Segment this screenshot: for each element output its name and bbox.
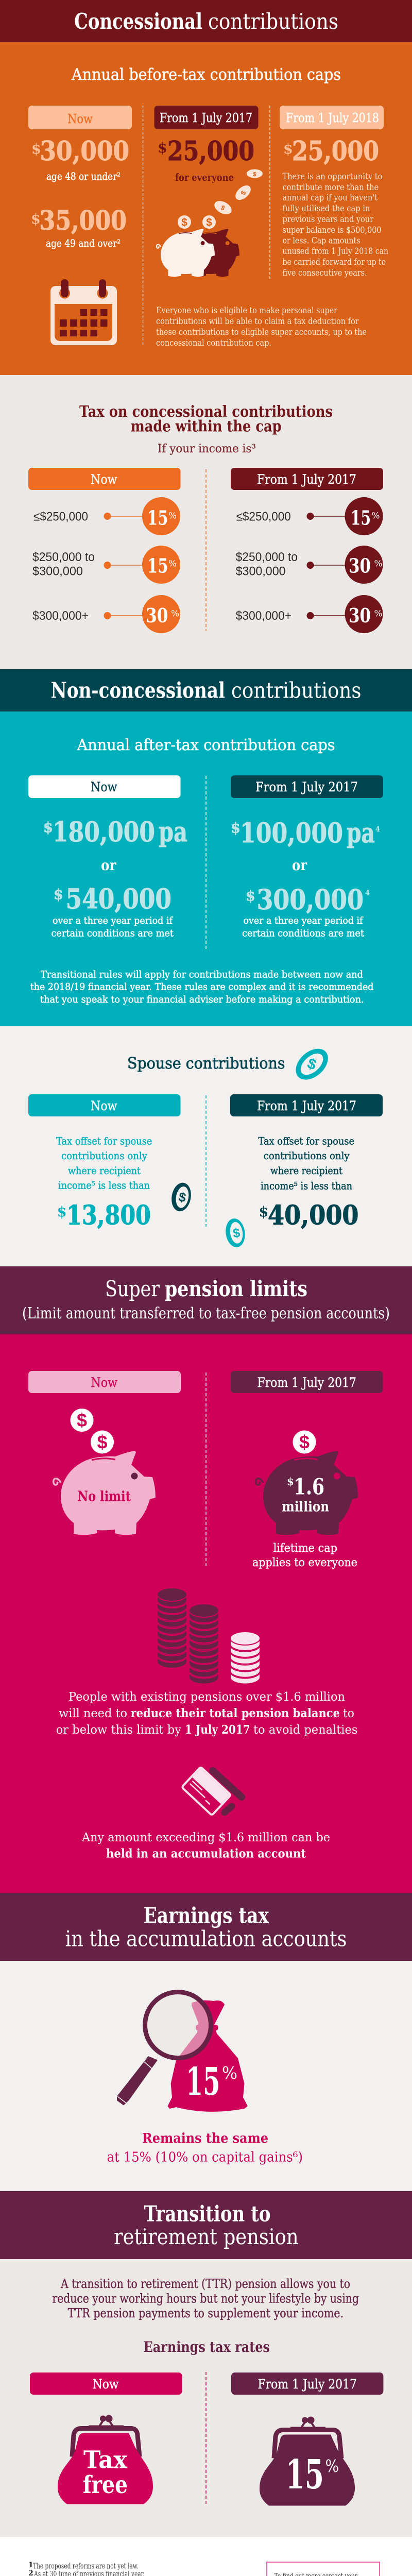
header band: earnings tax xyxy=(0,1893,412,1961)
column: from 1 July 2017: $300,000+ xyxy=(236,609,291,623)
icon: falling coins: $ xyxy=(252,171,257,178)
header band: transition to retirement: retirement pension xyxy=(114,2224,299,2249)
panel: spouse contributions xyxy=(0,1026,412,1266)
column: now xyxy=(28,775,187,939)
column: from 1 July 2017: From 1 July 2017 xyxy=(160,111,252,125)
column: now: 15 xyxy=(147,554,168,577)
text: tax deduction note: Everyone who is eligible to make personal super xyxy=(156,306,338,316)
text: TTR explanation: A transition to retirement (TTR) pension allows you to xyxy=(60,2277,350,2291)
icon: credit card xyxy=(182,1767,242,1816)
column: now: where recipient xyxy=(68,1164,141,1177)
column: now: income⁵ is less than xyxy=(58,1179,150,1192)
text: remains the same xyxy=(107,2131,303,2165)
panel: non-concessional contributions xyxy=(0,669,412,1026)
icon: falling coins: $ xyxy=(181,216,187,229)
column: from 1 July 2017: contributions only xyxy=(264,1149,350,1162)
text: carry forward explanation: contribute more than the xyxy=(282,182,379,193)
heading: tax within the cap: made within the cap xyxy=(131,417,282,435)
text: remains the same: Remains the same xyxy=(142,2131,268,2146)
icon: magnifier over money bag: 15 xyxy=(186,2060,220,2104)
column: from 1 July 2017: pa xyxy=(347,817,375,849)
column: from 1 July 2017: $300,000 xyxy=(236,565,286,579)
text: reduce pension balance: 1 July 2017 xyxy=(185,1723,250,1737)
icon: falling coins: $ xyxy=(206,216,212,229)
column: from 1 July 2017: $ xyxy=(246,888,255,904)
column: now: over a three year period if xyxy=(53,915,174,926)
column: from 1 July 2017 xyxy=(231,468,383,633)
header band: concessional contributions xyxy=(0,0,412,42)
column: from 1 July 2017: over a three year period if xyxy=(243,915,364,926)
text: reduce pension balance xyxy=(56,1690,357,1737)
text: tax deduction note: contributions will be able to claim a tax deduction for xyxy=(156,316,359,327)
column: now xyxy=(28,1371,181,1535)
column: now: No limit xyxy=(77,1488,131,1504)
icon: dark purse xyxy=(260,2416,355,2506)
column: now: age 49 and over² xyxy=(46,237,121,249)
column: from 1 July 2017: 1.6 xyxy=(294,1474,324,1500)
column: from 1 July 2017: 25,000 xyxy=(167,136,254,167)
column: from 1 July 2018: 25,000 xyxy=(292,136,379,167)
column: now: free xyxy=(83,2471,128,2499)
column: now: % xyxy=(168,511,177,521)
text: remains the same: at 15% (10% on capital gains⁶) xyxy=(107,2150,303,2165)
column: from 1 July 2017: From 1 July 2017 xyxy=(257,472,356,487)
column: from 1 July 2017: where recipient xyxy=(270,1164,342,1177)
text: reduce pension balance: will need to xyxy=(59,1707,127,1720)
text: TTR explanation xyxy=(53,2277,359,2320)
text: accumulation account: Any amount exceeding $1.6 million can be xyxy=(81,1831,330,1844)
text: transitional rules note: the 2018/19 financial year. These rules are complex and it is recommended xyxy=(30,981,373,993)
footnotes: The proposed reforms are not yet law. xyxy=(33,2562,139,2571)
header band: super pension limits: pension limits xyxy=(165,1276,307,1301)
column: now: 15 xyxy=(147,506,168,530)
column: from 1 July 2017 xyxy=(224,1094,383,1248)
column: now: % xyxy=(168,559,177,569)
header band: concessional contributions: Concessional xyxy=(74,9,202,34)
column: now: % xyxy=(171,609,179,619)
column: from 1 July 2017: 30 xyxy=(349,604,371,627)
subheading: income: If your income is³ xyxy=(158,443,256,455)
text: reduce pension balance: or below this limit by xyxy=(56,1723,181,1737)
icon: falling coins: $ xyxy=(239,189,248,196)
column: now: contributions only xyxy=(61,1149,148,1162)
column: from 1 July 2017: 4 xyxy=(375,825,380,834)
text: transitional rules note xyxy=(30,969,373,1005)
heading: tax within the cap: Tax on concessional contributions xyxy=(79,403,333,421)
heading: spouse contributions: Spouse contributions xyxy=(127,1055,285,1073)
column: from 1 July 2017: income⁵ is less than xyxy=(261,1180,352,1192)
column: from 1 July 2017: $ xyxy=(299,1431,310,1453)
icon: teal coin xyxy=(224,1217,247,1248)
column: from 1 July 2017 xyxy=(231,2372,383,2506)
column: now: $ xyxy=(57,1204,66,1220)
column: from 1 July 2017: certain conditions are met xyxy=(242,927,364,939)
column: from 1 July 2017: $250,000 to xyxy=(236,550,298,564)
callout: contact box xyxy=(267,2562,380,2576)
heading: tax within the cap xyxy=(79,403,333,435)
column: from 1 July 2017: From 1 July 2017 xyxy=(258,2377,357,2392)
panel: concessional contributions xyxy=(0,0,412,375)
column: now: 13,800 xyxy=(66,1200,151,1231)
text: carry forward explanation: unused from 1 July 2018 can xyxy=(282,246,388,257)
column: now: 30 xyxy=(146,604,168,627)
column: now: $300,000 xyxy=(32,565,83,579)
column: from 1 July 2017: 15 xyxy=(351,506,371,530)
column: now: $250,000 to xyxy=(32,550,95,564)
column: now: ≤$250,000 xyxy=(33,510,88,524)
text: accumulation account: held in an accumulation account xyxy=(106,1847,306,1861)
header band: super pension limits: Super xyxy=(105,1276,160,1301)
column: now: $ xyxy=(54,887,63,903)
text: carry forward explanation: fully utilised the cap in xyxy=(282,204,370,214)
divider xyxy=(205,1095,207,1227)
column: from 1 July 2018 xyxy=(280,106,388,278)
text: carry forward explanation: five consecutive years. xyxy=(282,268,367,278)
column: from 1 July 2017: 100,000 xyxy=(240,817,343,849)
header band: earnings tax: in the accumulation accounts xyxy=(65,1926,347,1952)
column: from 1 July 2017: From 1 July 2017 xyxy=(255,779,358,794)
column: now xyxy=(28,468,180,633)
column: from 1 July 2017: ≤$250,000 xyxy=(236,510,291,524)
column: from 1 July 2017: % xyxy=(374,559,382,569)
column: from 1 July 2017: applies to everyone xyxy=(252,1556,357,1569)
header band: super pension limits xyxy=(0,1266,412,1334)
column: now: $300,000+ xyxy=(32,609,89,623)
icon: magnifier over money bag xyxy=(117,1992,248,2112)
icon: pink piggy bank xyxy=(54,1451,156,1535)
column: from 1 July 2017: 30 xyxy=(349,554,371,577)
text: carry forward explanation: be carried forward for up to xyxy=(282,257,386,267)
column: from 1 July 2017: $ xyxy=(158,140,167,156)
divider xyxy=(205,469,207,631)
column: now: 540,000 xyxy=(66,883,171,915)
column: from 1 July 2017 xyxy=(231,775,383,939)
header band: non-concessional contributions: contributions xyxy=(231,678,362,703)
heading: annual after-tax caps: Annual after-tax contribution caps xyxy=(77,736,335,754)
column: from 1 July 2018: From 1 July 2018 xyxy=(286,111,379,125)
column: from 1 July 2017: 15 xyxy=(286,2451,324,2498)
text: accumulation account xyxy=(81,1831,330,1861)
icon: dark coin xyxy=(169,1181,193,1213)
divider xyxy=(205,776,207,950)
column: now: 30,000 xyxy=(40,136,129,167)
header band: transition to retirement xyxy=(0,2191,412,2259)
text: carry forward explanation xyxy=(282,172,388,278)
column: now: $ xyxy=(31,141,41,157)
column: from 1 July 2017: From 1 July 2017 xyxy=(257,1098,356,1113)
text: TTR explanation: TTR pension payments to supplement your income. xyxy=(68,2306,344,2320)
icon: falling coins: $ xyxy=(219,204,227,212)
column: now xyxy=(28,106,132,345)
column: now: Now xyxy=(67,112,93,126)
column: now: Tax xyxy=(83,2446,128,2475)
column: now: $ xyxy=(77,1410,87,1431)
text: carry forward explanation: annual cap if you haven't xyxy=(282,193,377,203)
column: now: Tax offset for spouse xyxy=(56,1134,152,1147)
text: transitional rules note: Transitional rules will apply for contributions made between now and xyxy=(41,969,363,980)
text: reduce pension balance: to xyxy=(343,1707,354,1720)
column: from 1 July 2018: $ xyxy=(283,141,293,157)
column: now: certain conditions are met xyxy=(52,927,174,939)
icon: spouse coin xyxy=(290,1043,334,1086)
header band: non-concessional contributions: Non-concessional xyxy=(50,678,225,703)
column: from 1 July 2017: 40,000 xyxy=(268,1200,358,1231)
text: reduce pension balance: People with existing pensions over $1.6 million xyxy=(68,1690,345,1704)
heading: annual before-tax caps: Annual before-tax contribution caps xyxy=(71,65,341,84)
text: carry forward explanation: previous years and your xyxy=(282,214,374,225)
column: from 1 July 2017: $ xyxy=(287,1476,294,1488)
column: from 1 July 2017: $ xyxy=(259,1204,268,1220)
text: reduce pension balance: reduce their total pension balance xyxy=(131,1706,340,1720)
header band: concessional contributions: contributions xyxy=(208,9,338,34)
icon: spouse coin: $ xyxy=(305,1055,319,1074)
icon: falling coins xyxy=(178,169,263,229)
panel: footer xyxy=(0,2537,412,2576)
column: now: age 48 or under² xyxy=(46,170,121,182)
panel: super pension limits xyxy=(0,1266,412,1893)
column: from 1 July 2017: 300,000 xyxy=(256,884,364,916)
column: from 1 July 2017: % xyxy=(325,2456,339,2476)
icon: piggy banks xyxy=(157,229,239,277)
text: reduce pension balance: to avoid penalties xyxy=(253,1723,357,1737)
column: from 1 July 2017: From 1 July 2017 xyxy=(258,1375,356,1390)
column: from 1 July 2017: for everyone xyxy=(175,171,234,183)
text: carry forward explanation: or less. Cap amounts xyxy=(282,236,360,246)
column: now: or xyxy=(101,857,117,874)
column: now: $ xyxy=(31,211,41,227)
column: from 1 July 2017 xyxy=(231,1371,383,1569)
column: from 1 July 2017: million xyxy=(282,1499,329,1515)
panel: earnings tax xyxy=(0,1893,412,2191)
divider xyxy=(205,2372,207,2504)
text: carry forward explanation: There is an opportunity to xyxy=(282,172,382,182)
column: from 1 July 2017: % xyxy=(372,511,380,521)
text: carry forward explanation: super balance is $500,000 xyxy=(282,225,381,235)
text: TTR explanation: reduce your working hours but not your lifestyle by using xyxy=(53,2292,359,2306)
text: tax deduction note xyxy=(156,306,367,348)
icon: calendar xyxy=(50,279,117,345)
column: now xyxy=(30,2372,182,2504)
column: now: Now xyxy=(93,2377,119,2392)
icon: teal coin: $ xyxy=(232,1226,241,1241)
column: from 1 July 2017: $ xyxy=(231,820,241,836)
column: now: $ xyxy=(43,820,53,836)
column: from 1 July 2017 xyxy=(154,106,263,277)
text: tax deduction note: these contributions to eligible super accounts, up to the xyxy=(156,327,367,337)
column: now: Now xyxy=(91,1375,118,1390)
header band: transition to retirement: Transition to xyxy=(144,2201,271,2227)
icon: dark coin: $ xyxy=(178,1190,187,1205)
column: now: 35,000 xyxy=(39,206,127,236)
column: now: Now xyxy=(91,472,117,487)
column: from 1 July 2017: lifetime cap xyxy=(273,1542,337,1555)
icon: coin stacks xyxy=(157,1588,260,1684)
column: now: $ xyxy=(97,1431,108,1453)
footnotes: 1 xyxy=(28,2561,33,2569)
column: from 1 July 2017: % xyxy=(374,609,382,619)
icon: magnifier over money bag: % xyxy=(222,2063,237,2083)
divider xyxy=(205,1372,207,1567)
column: from 1 July 2017: Tax offset for spouse xyxy=(259,1134,354,1147)
column: now: 180,000 xyxy=(53,816,155,848)
column: from 1 July 2017: or xyxy=(292,857,307,874)
column dividers xyxy=(143,106,270,345)
text: transitional rules note: that you speak to your financial adviser before making a contribution. xyxy=(40,994,364,1005)
column: now: Now xyxy=(91,779,117,794)
panel: tax on concessional contributions xyxy=(0,375,412,669)
header band: earnings tax: Earnings tax xyxy=(144,1903,269,1928)
column: now: pa xyxy=(159,816,187,848)
column: now xyxy=(28,1094,193,1231)
footnotes xyxy=(28,2561,259,2576)
text: tax deduction note: concessional contribution cap. xyxy=(156,338,271,348)
header band: non-concessional contributions xyxy=(0,669,412,711)
column: from 1 July 2017: 4 xyxy=(365,889,370,897)
icon: dark piggy bank xyxy=(256,1451,358,1535)
icon: crimson purse xyxy=(58,2415,153,2504)
panel: transition to retirement pension xyxy=(0,2191,412,2537)
heading: earnings tax rates: Earnings tax rates xyxy=(144,2338,270,2355)
column: now: Now xyxy=(91,1098,117,1113)
